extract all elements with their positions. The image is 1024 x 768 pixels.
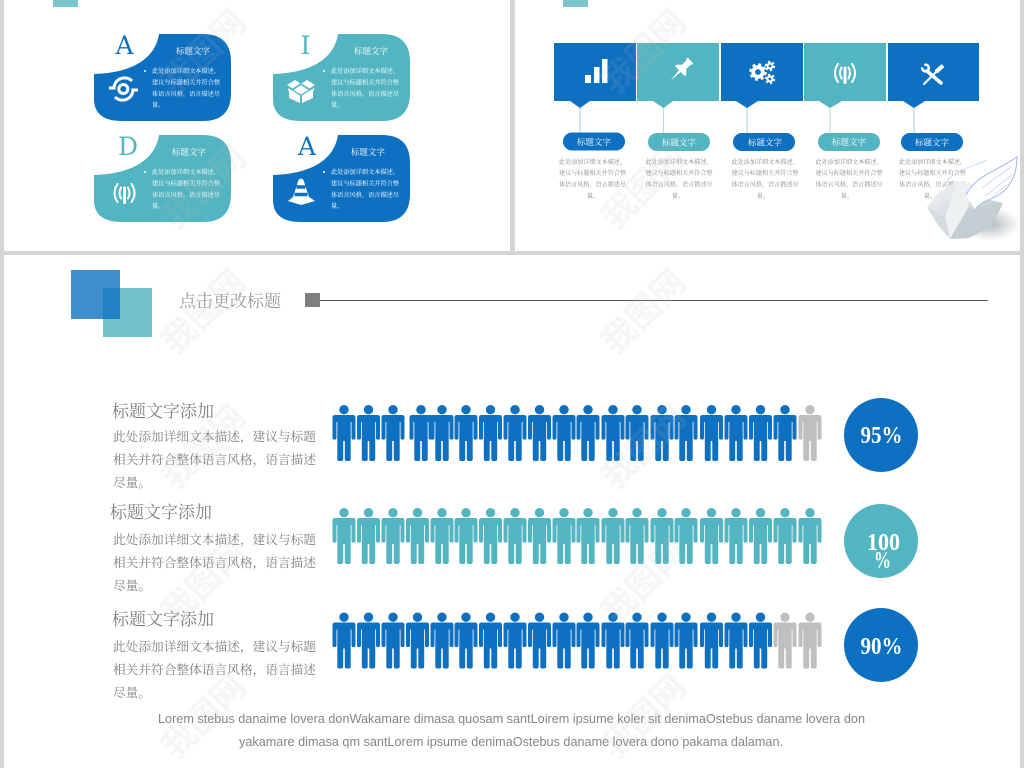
step 5: 标题文字 [915,138,949,148]
step 1: 量。 [587,192,599,200]
step 5: 体语言风格，语言描述尽 [899,180,966,188]
text block: row 2: 此处添加详细文本描述，建议与标题 [113,532,316,548]
card: I: 建议与标题相关并符合整 [331,78,400,86]
watermarks: 我图网 [595,533,694,632]
pictogram: row 1 95% [332,405,822,461]
step 3: 建议与标题相关并符合整 [731,169,799,177]
watermarks: 我图网 [595,398,694,497]
text block: row 1: 相关并符合整体语言风格，语言描述 [113,452,316,468]
step 1: 建议与标题相关并符合整 [559,169,626,177]
text block: row 3: 此处添加详细文本描述，建议与标题 [113,639,316,655]
badge: 95% [844,398,918,472]
pictogram: row 2 100% [332,508,822,564]
panel: bottom slide [4,255,1020,768]
badge: 90% [844,608,918,682]
step 5: 量。 [924,192,936,200]
step 5: 建议与标题相关并符合整 [899,169,966,177]
watermarks: 我图网 [155,138,254,237]
step 3: 此处添加详细文本描述， [731,158,799,166]
step 2: 体语言风格，语言描述尽 [645,180,713,188]
watermarks: 我图网 [155,668,254,767]
card: A: 量。 [152,101,164,109]
card: D: D [118,132,138,161]
step 4: 标题文字 [832,137,866,147]
card: A: A [114,31,134,60]
text block: row 2: 相关并符合整体语言风格，语言描述 [113,555,316,571]
panel: top right slide [515,0,1020,251]
text block: closing lorem: Lorem stebus danaime lovera donWakamare dimasa quosam santLoirem ipsume koler sit denimaOstebus daname lovera don [158,711,865,726]
watermarks: 我图网 [155,533,254,632]
badge: 90%: 90% [860,633,902,660]
card: A second [273,132,410,222]
card: I: 标题文字 [354,46,388,56]
watermarks: 我图网 [595,263,694,362]
card: A second: 量。 [331,202,343,210]
card: D: 此处添加详细文本描述， [152,168,220,176]
card: I: I [301,31,310,60]
step 3 [721,43,803,200]
card: D [94,132,231,222]
step 3: 体语言风格，语言描述尽 [731,180,799,188]
step 1: 体语言风格，语言描述尽 [559,180,626,188]
text block: row 1: 标题文字添加 [112,402,214,421]
step 4: 此处添加详细文本描述， [815,158,883,166]
card: I: 此处添加详细文本描述， [331,67,399,75]
badge: 100%: 100 [867,530,900,556]
step 1: 标题文字 [577,137,611,147]
text block: row 2: 标题文字添加 [110,503,212,522]
watermarks: 我图网 [155,3,254,102]
card: I [273,31,410,121]
card: A: 体语言风格，语言描述尽 [152,90,221,98]
badge: 100%: % [874,548,891,574]
watermarks: 我图网 [595,668,694,767]
step 4: 体语言风格，语言描述尽 [815,180,883,188]
step 2: 量。 [672,192,684,200]
watermarks: 我图网 [155,398,254,497]
card: D: 量。 [152,202,164,210]
header squares [71,270,152,337]
pictogram: row 3 90% [332,612,822,668]
card: A second: 此处添加详细文本描述， [331,168,399,176]
step 3: 标题文字 [748,138,782,148]
step 1: 此处添加详细文本描述， [559,158,626,166]
icon: paper swan with wing [927,157,1020,241]
text block: row 2: 尽量。 [113,579,151,593]
badge: 95%: 95% [860,422,902,449]
text block: row 1: 尽量。 [113,476,151,490]
text block: row 1: 此处添加详细文本描述，建议与标题 [113,429,316,445]
step 1 [554,43,636,200]
step 2 [637,43,719,200]
card: D: 体语言风格，语言描述尽 [152,191,221,199]
card: A: 标题文字 [176,46,210,56]
card: D: 标题文字 [172,147,206,157]
card: I: 量。 [331,101,343,109]
step 5 [888,43,979,200]
step 2: 建议与标题相关并符合整 [645,169,713,177]
text block: row 1 [112,402,316,490]
title: 点击更改标题 [179,292,281,311]
text block: closing lorem [158,711,865,749]
step 3: 量。 [757,192,769,200]
watermarks [155,3,694,767]
card: D: 建议与标题相关并符合整 [152,180,221,188]
step 4: 建议与标题相关并符合整 [815,169,883,177]
step 2: 此处添加详细文本描述， [645,158,713,166]
badge: 100% [844,504,918,578]
text block: closing lorem: yakamare dimasa qm santLorem ipsume denimaOstebus daname lovera dono pakama dalaman. [239,734,783,749]
card: A: 建议与标题相关并符合整 [152,78,221,86]
card: I: 体语言风格，语言描述尽 [331,90,400,98]
text block: row 3: 相关并符合整体语言风格，语言描述 [113,662,316,678]
watermarks: 我图网 [595,3,694,102]
card: A second: 体语言风格，语言描述尽 [331,191,400,199]
watermarks: 我图网 [155,263,254,362]
panel: top left slide [4,0,510,251]
card: A: 此处添加详细文本描述， [152,67,220,75]
text block: row 3 [112,610,316,700]
card: A second: 建议与标题相关并符合整 [331,180,400,188]
text block: row 3: 标题文字添加 [112,610,214,629]
watermarks: 我图网 [595,138,694,237]
text block: row 3: 尽量。 [113,686,151,700]
card: A second: A [297,132,317,161]
card: A [94,31,231,121]
step 2: 标题文字 [662,138,696,148]
text block: row 2 [110,503,316,593]
card: A second: 标题文字 [351,147,385,157]
step 5: 此处添加详细文本描述， [899,158,966,166]
title rule [305,293,988,307]
step 4 [804,43,886,200]
step 4: 量。 [841,192,853,200]
